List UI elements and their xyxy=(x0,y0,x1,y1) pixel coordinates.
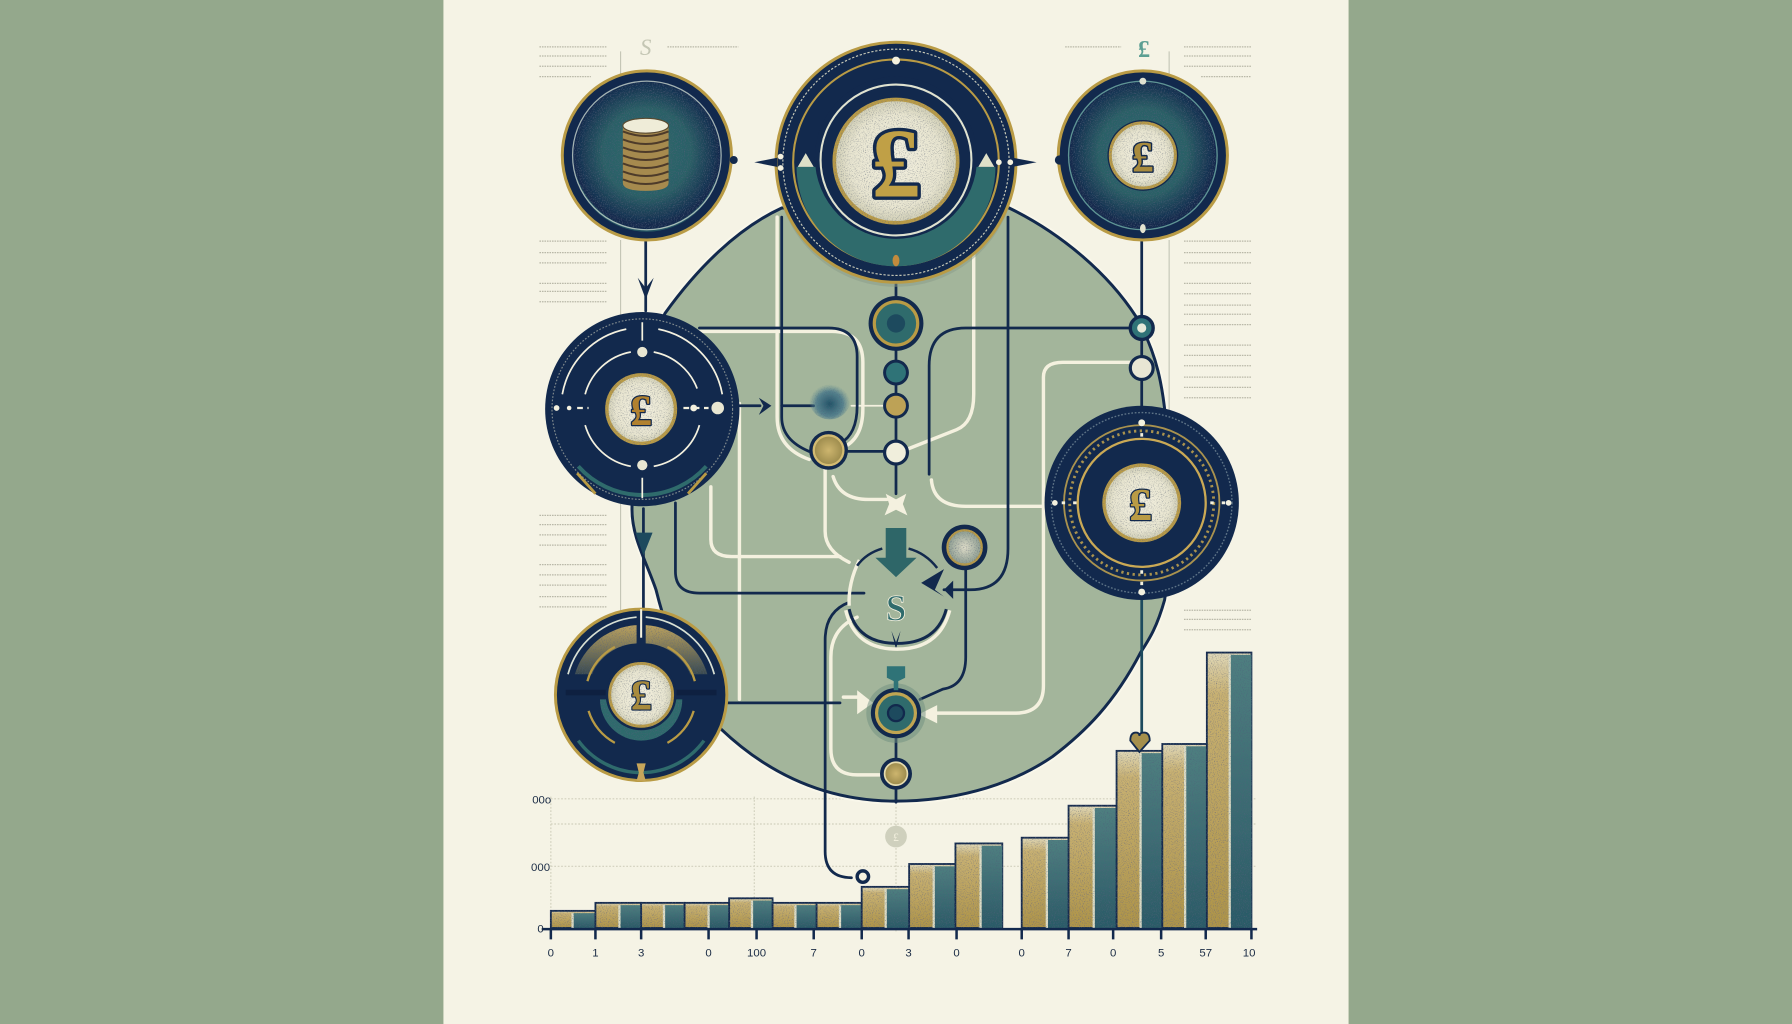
speckled blob node xyxy=(809,381,850,419)
large green rounded shape xyxy=(632,208,1169,801)
chart: x axis labels: 3 xyxy=(638,948,644,960)
flow lines: cream xyxy=(699,217,1131,775)
chart: y axis labels: 0 xyxy=(537,924,544,936)
coin badge E: pound with gold rings xyxy=(1045,406,1239,600)
pale coin under flow xyxy=(885,826,907,847)
coin badge E: pound with gold rings: £ xyxy=(1129,479,1152,530)
chart: x axis labels: 7 xyxy=(811,948,817,960)
node: gold left xyxy=(809,431,848,470)
chart: x axis labels: 57 xyxy=(1199,948,1212,960)
connector circle around S xyxy=(846,549,950,649)
connector studs xyxy=(754,158,777,167)
coin badge C: pound xyxy=(1055,71,1227,240)
star junction xyxy=(885,494,907,515)
chart gridlines xyxy=(551,754,1257,931)
chart: x axis labels: 0 xyxy=(705,948,712,960)
pale coin under flow: £ xyxy=(893,832,899,844)
chart: x axis labels: 0 xyxy=(953,948,960,960)
node: gold xyxy=(885,394,907,417)
coin badge F: pound with gold arcs: £ xyxy=(631,673,652,720)
chart: x axis labels: 100 xyxy=(747,948,766,960)
placeholder text blocks in margins xyxy=(539,47,1251,630)
node: grey speckled xyxy=(942,525,987,570)
chart: x axis labels: 7 xyxy=(1065,948,1072,960)
chart: x axis labels: 0 xyxy=(548,948,554,960)
coin badge A: stack of coins xyxy=(562,71,738,240)
chart: x axis labels: 5 xyxy=(1158,948,1164,960)
chart: x axis labels: 10 xyxy=(1243,948,1255,960)
flow nodes centre column xyxy=(809,296,1153,790)
connector circle around S: S xyxy=(886,588,906,629)
coin badge C: pound: £ xyxy=(1132,133,1154,181)
chart: y axis labels xyxy=(531,794,551,936)
teal marker above lower node xyxy=(887,666,905,690)
chart: y axis labels: 00o xyxy=(532,794,551,806)
node: lower teal xyxy=(866,683,926,743)
chart: x axis labels: 0 xyxy=(1110,948,1116,960)
coin badge B: main pound: £ xyxy=(871,110,921,219)
chart: x axis labels: 0 xyxy=(1019,948,1025,960)
chart: x axis labels: 0 xyxy=(859,948,865,960)
chart: axis with ticks xyxy=(542,929,1257,939)
cream arrowheads xyxy=(857,690,937,723)
chart: x axis labels xyxy=(548,948,1255,960)
node: lower gold xyxy=(880,758,912,790)
chart: x axis labels: 3 xyxy=(905,948,912,960)
chart: bars xyxy=(551,653,1251,928)
coin badge D: pound with dial: £ xyxy=(630,387,652,435)
small faint S symbol: S xyxy=(640,35,652,60)
chart line end node xyxy=(857,871,869,882)
node: white xyxy=(885,441,907,464)
chart: x axis labels: 1 xyxy=(592,948,599,960)
arrowheads: navy xyxy=(635,278,953,649)
icon: coin stack xyxy=(623,118,669,191)
chart: y axis labels: 000 xyxy=(531,862,550,874)
node: right white xyxy=(1130,357,1153,379)
node: teal xyxy=(885,361,907,384)
central cream panel xyxy=(443,0,1349,1024)
coin badge B: main pound xyxy=(754,42,1037,287)
coin badge D: pound with dial xyxy=(545,312,739,506)
teal down arrow xyxy=(875,528,917,577)
node: large teal xyxy=(869,296,923,351)
heart marker on bar xyxy=(1130,733,1150,752)
margin rules xyxy=(621,51,1169,623)
small teal pound symbol: £ xyxy=(1138,37,1150,63)
flow lines: navy xyxy=(643,217,1142,878)
node: right teal xyxy=(1130,317,1153,339)
coin badge F: pound with gold arcs xyxy=(555,609,727,781)
